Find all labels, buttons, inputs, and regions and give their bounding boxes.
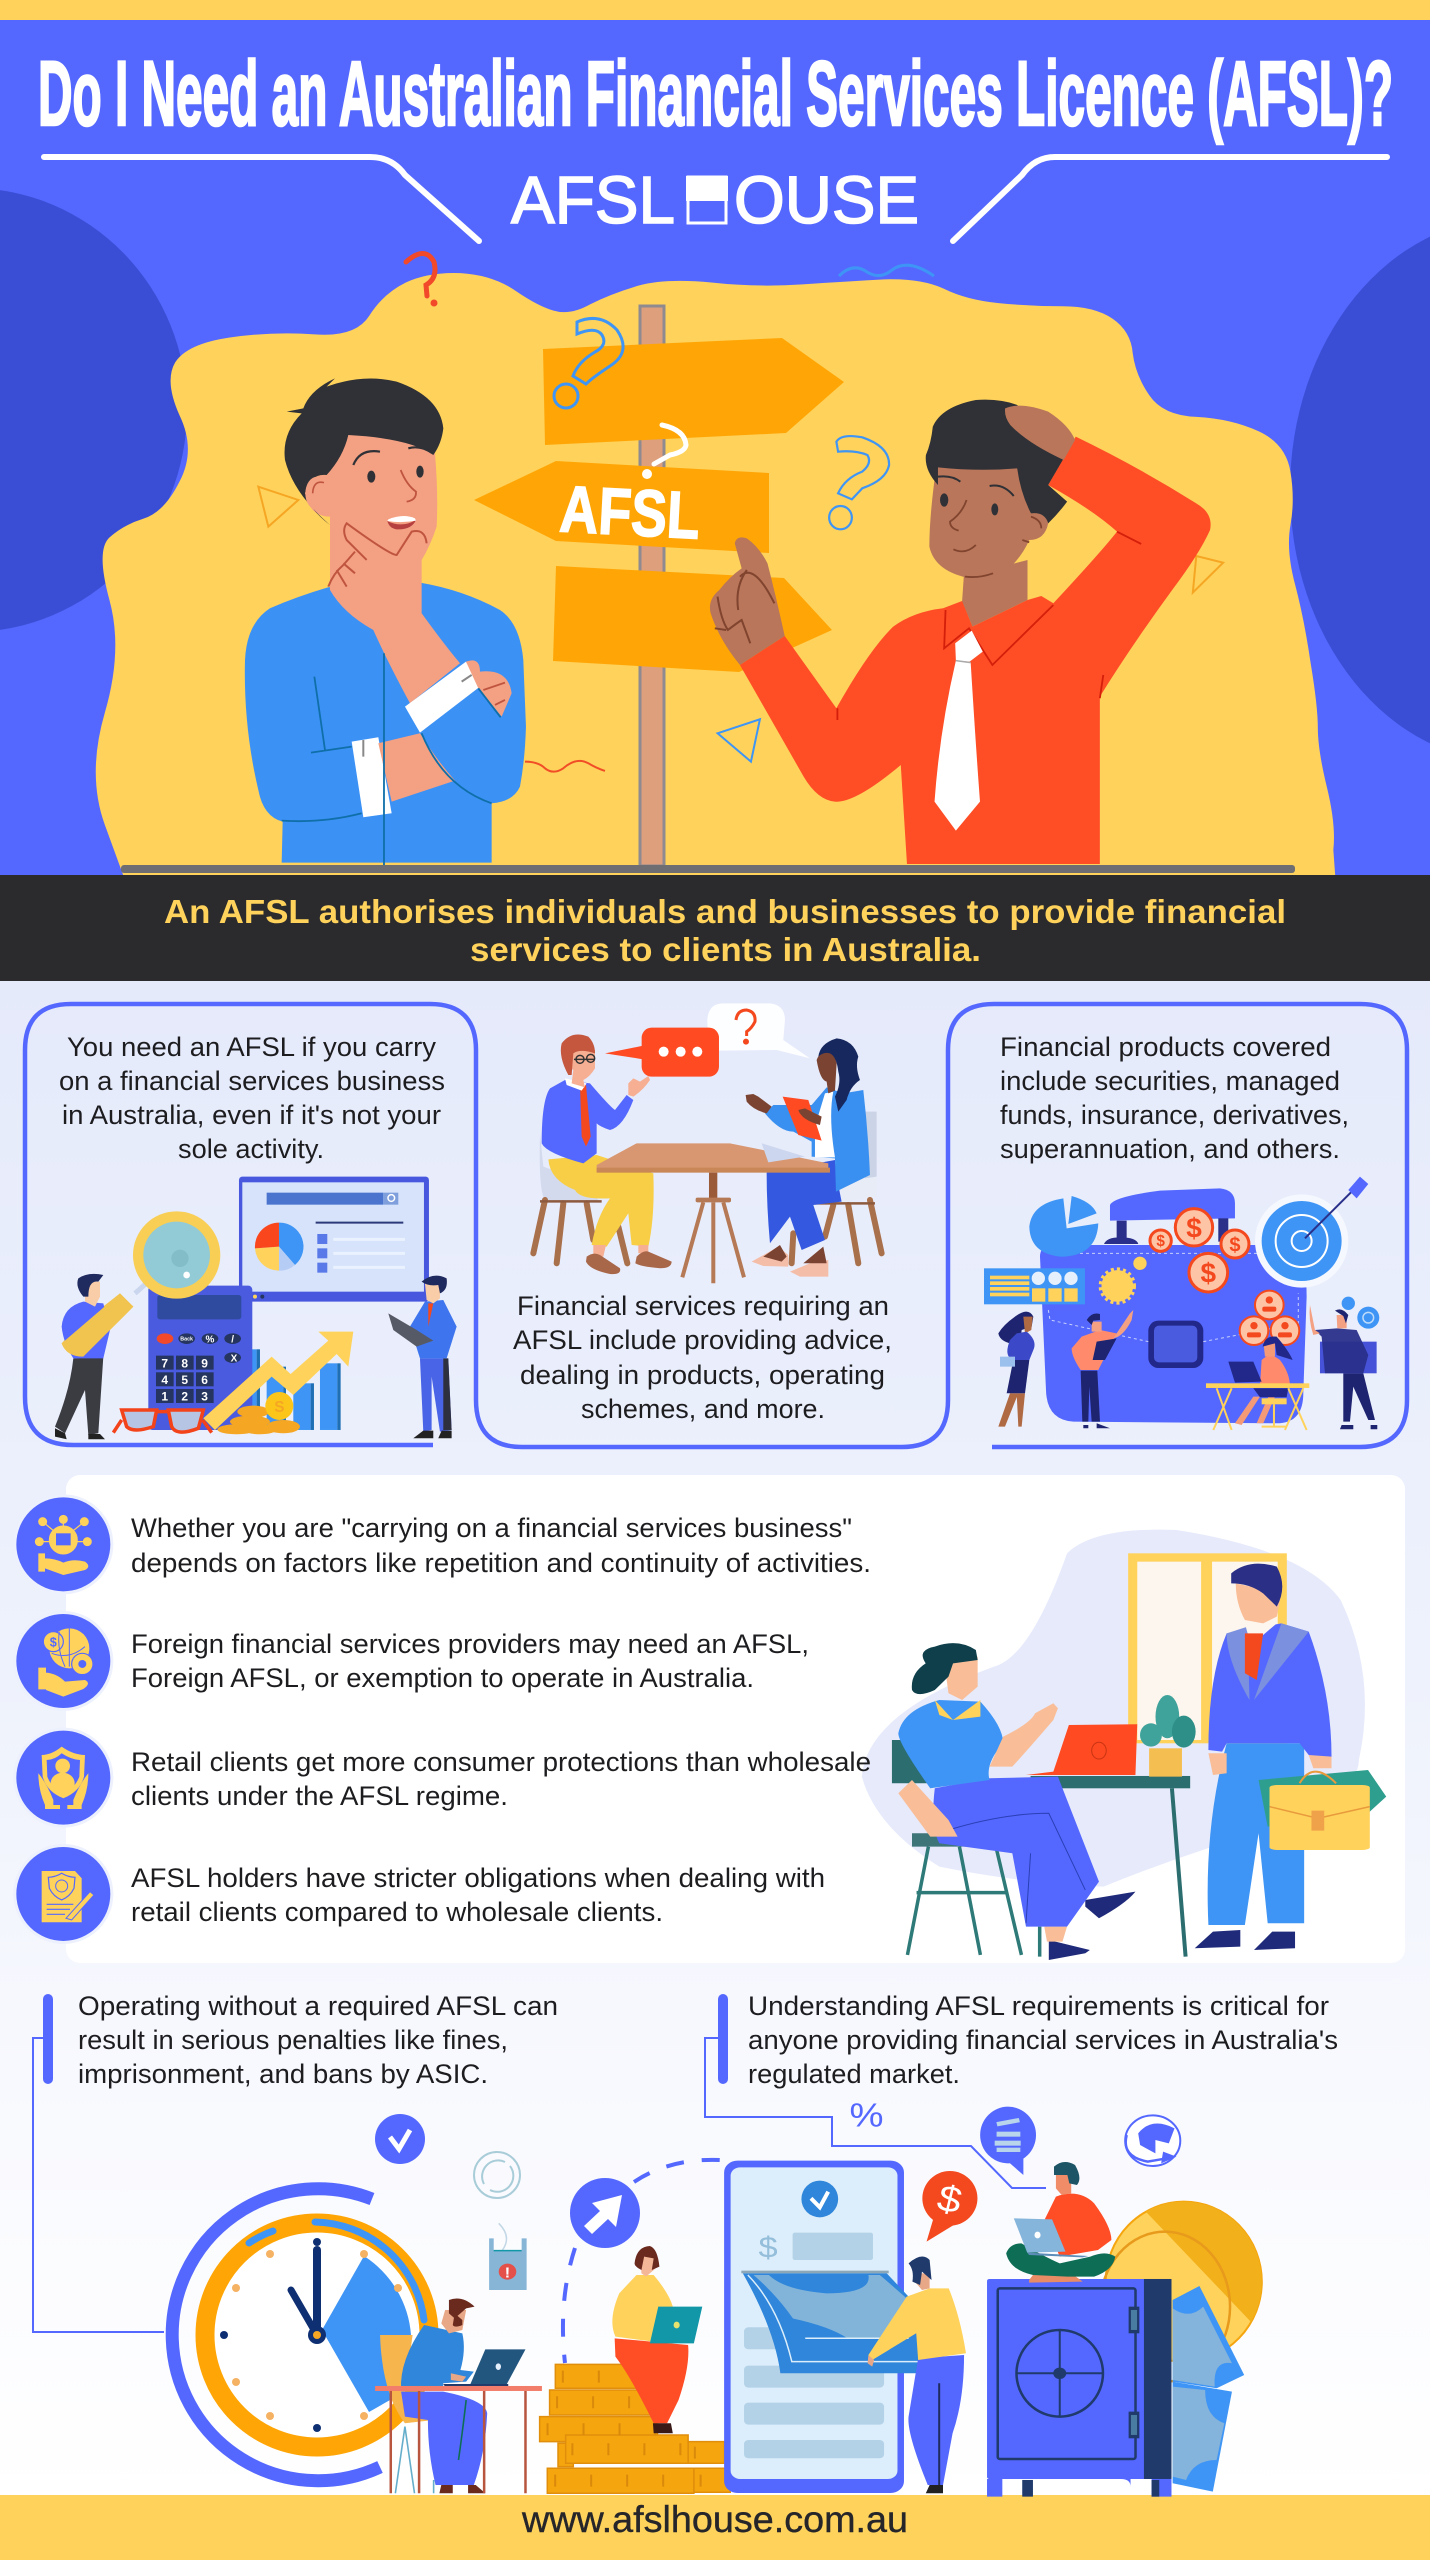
bank notes: [1173, 2286, 1244, 2492]
woman at table: [746, 1038, 882, 1277]
seated woman: [898, 1643, 1135, 1960]
callout: penalties: result in serious penalties like fines,: [78, 2025, 508, 2055]
coins: S: [274, 1399, 284, 1416]
post: [640, 306, 664, 866]
panel 2 text: [513, 1291, 892, 1424]
magnifier: [62, 1211, 220, 1357]
blue squiggle: [839, 265, 934, 276]
connector right: [705, 2038, 1046, 2188]
alert document: !: [505, 2265, 510, 2281]
calculator: 4: [161, 1373, 168, 1387]
standing man: [1195, 1564, 1332, 1950]
light content background: [0, 981, 1430, 2501]
dollar coins: [1150, 1209, 1249, 1292]
pie icon: [1029, 1196, 1098, 1257]
panel 1 illustration: calculator and analysts: [55, 1177, 457, 1439]
calculator: 8: [181, 1356, 188, 1370]
panel 3 illustration: giant briefcase with team: $: [1229, 1234, 1241, 1256]
left analyst: [55, 1274, 133, 1439]
red glasses: [113, 1410, 212, 1433]
list item 1: depends on factors like repetition and continuity of activities.: [131, 1548, 871, 1578]
list text: [131, 1513, 871, 1927]
gears: [1101, 1257, 1379, 1329]
bottom sign: [553, 566, 832, 672]
calculator: X: [231, 1353, 238, 1364]
panel 1 text: You need an AFSL if you carry: [67, 1032, 437, 1062]
bar chart: [214, 1349, 341, 1430]
table: [597, 1143, 830, 1283]
desk and stool: [892, 1740, 1190, 1957]
calculator: [148, 1286, 252, 1430]
icon: arrow badge: [570, 2178, 640, 2248]
alert document: [489, 2223, 527, 2290]
panel 3 illustration: giant briefcase with team: [984, 1177, 1379, 1430]
callout: requirements: [705, 1991, 1338, 2188]
panel 3 text: include securities, managed: [1000, 1066, 1340, 1096]
bottom illustration: phone, safe and people: [724, 2097, 1262, 2497]
laptop and plant: [1026, 1695, 1196, 1777]
left background circle: [0, 188, 187, 632]
pale backdrop: [862, 1530, 1365, 1887]
illustration: woman and man in office: [862, 1530, 1386, 1960]
calculator: /: [231, 1335, 234, 1346]
icon: network in hand: [13, 1494, 113, 1594]
calculator: 2: [181, 1390, 188, 1404]
sign label: AFSL: [558, 471, 702, 553]
monitor: [239, 1177, 429, 1302]
list item 3: clients under the AFSL regime.: [131, 1781, 508, 1811]
calculator: 1: [161, 1390, 168, 1404]
callout: requirements: Understanding AFSL requirements is critical for: [748, 1991, 1329, 2021]
hero panel: [0, 20, 1430, 876]
callout: penalties: [33, 1991, 558, 2332]
list item 1: Whether you are "carrying on a financial services business": [131, 1513, 852, 1543]
white info card: [66, 1475, 1405, 1963]
clock: [172, 2189, 429, 2481]
panel 3 text: superannuation, and others.: [1000, 1134, 1340, 1164]
panel 3 illustration: giant briefcase with team: $: [1201, 1258, 1217, 1289]
coins: [217, 1392, 300, 1434]
character: thinking man in blue: [245, 378, 605, 865]
list item 2: Foreign financial services providers may need an AFSL,: [131, 1629, 809, 1659]
list item 4: [131, 1863, 825, 1927]
panel 1 text: [59, 1032, 445, 1164]
woman on safe: [1006, 2162, 1115, 2283]
red speech bubble: [605, 1028, 719, 1077]
icon: document and pen: [13, 1844, 113, 1944]
connector left: [33, 2038, 164, 2332]
panel 3 text: Financial products covered: [1000, 1032, 1331, 1062]
icon: white question mark on sign: [642, 425, 686, 479]
logo house block: [686, 176, 728, 223]
middle sign: [474, 461, 769, 553]
man at phone: [868, 2257, 966, 2493]
panel 1 text: sole activity.: [178, 1134, 324, 1164]
panel 2 illustration: two people meeting at table: [533, 1003, 882, 1283]
list item 3: Retail clients get more consumer protections than wholesale: [131, 1747, 871, 1777]
books bubble: [980, 2107, 1036, 2175]
panel 2 text: Financial services requiring an: [517, 1291, 889, 1321]
logo: AFSL House: [511, 163, 919, 238]
subtitle text: [164, 893, 1286, 968]
calculator: 7: [161, 1356, 168, 1370]
logo: AFSL House: AFSL: [511, 163, 675, 238]
callout: requirements: regulated market.: [748, 2059, 960, 2089]
big coin: [1100, 2202, 1262, 2382]
calculator: %: [206, 1335, 215, 1346]
list item 1: [131, 1513, 871, 1578]
panel 2 text: dealing in products, operating: [520, 1360, 885, 1390]
panel 1 text: in Australia, even if it's not your: [62, 1100, 441, 1130]
panel 2 text: schemes, and more.: [581, 1394, 825, 1424]
woman on coins: [612, 2246, 702, 2433]
team coins: [1240, 1291, 1299, 1345]
yellow blob: [96, 273, 1335, 875]
safe: [987, 2279, 1171, 2497]
dashed path: [563, 2160, 720, 2363]
subtitle band: [0, 875, 1430, 981]
man at table: [533, 1034, 672, 1274]
signpost: [474, 306, 844, 866]
list item 4: AFSL holders have stricter obligations when dealing with: [131, 1863, 825, 1893]
icon: globe and gear in hand: $: [50, 1636, 57, 1650]
growth arrow: [203, 1332, 353, 1430]
icon: blue question mark on sign: [554, 318, 623, 408]
icon: refresh ring: [474, 2152, 520, 2198]
calculator: 3: [201, 1390, 208, 1404]
icon: red question mark: [406, 254, 438, 306]
subtitle text: services to clients in Australia.: [470, 931, 981, 968]
subtitle text: An AFSL authorises individuals and businesses to provide financial: [164, 893, 1286, 930]
list item 3: [131, 1747, 871, 1811]
panel 2 text: AFSL include providing advice,: [513, 1325, 892, 1355]
right background circle: [1290, 218, 1430, 762]
panel outlines: [25, 1004, 1407, 1447]
phone: $: [759, 2230, 778, 2264]
woman at desk: [1206, 1336, 1309, 1430]
white question bubble: [707, 1003, 810, 1058]
calculator: Back: [180, 1337, 193, 1343]
calculator: 9: [201, 1356, 208, 1370]
dollar bubble: $: [933, 2177, 966, 2222]
left title bracket: [44, 157, 479, 241]
icon: shield and person in hands: [13, 1728, 113, 1828]
callout: penalties: imprisonment, and bans by ASIC.: [78, 2059, 488, 2089]
panel 3 illustration: giant briefcase with team: $: [1156, 1233, 1165, 1250]
footer url: www.afslhouse.com.au: [521, 2499, 908, 2540]
briefcase with money: [1259, 1770, 1386, 1850]
panel 3 illustration: giant briefcase with team: $: [1186, 1212, 1202, 1243]
top yellow band: [0, 0, 1430, 20]
percent sign: %: [849, 2097, 883, 2134]
dashboard card: [984, 1268, 1085, 1304]
character: man in red scratching head: [710, 400, 1223, 864]
calculator: 6: [201, 1373, 208, 1387]
desk worker: [375, 2298, 542, 2493]
ground line: [121, 865, 1295, 873]
briefcase: [1040, 1188, 1307, 1423]
window: [1128, 1553, 1287, 1743]
calculator: 5: [181, 1373, 188, 1387]
bottom illustration: desk worker, coins and woman: [375, 2223, 730, 2493]
icon: globe and gear in hand: [13, 1611, 113, 1711]
globe icon: [1125, 2115, 1180, 2166]
logo: AFSL House: OUSE: [734, 163, 919, 238]
list icons: [13, 1494, 113, 1944]
callout: penalties: Operating without a required AFSL can: [78, 1991, 558, 2021]
phone: [724, 2161, 904, 2493]
panel 3 text: funds, insurance, derivatives,: [1000, 1100, 1349, 1130]
right analyst: [388, 1276, 457, 1438]
list item 2: Foreign AFSL, or exemption to operate in Australia.: [131, 1663, 754, 1693]
icon: check badge: [375, 2114, 425, 2164]
callout: requirements: anyone providing financial services in Australia's: [748, 2025, 1338, 2055]
dollar bubble: [922, 2171, 977, 2242]
coin stack: [540, 2364, 730, 2493]
list item 2: [131, 1629, 809, 1693]
footer band: [0, 2495, 1430, 2560]
top sign: [543, 338, 844, 445]
target icon: [1255, 1177, 1368, 1288]
right title bracket: [953, 157, 1387, 241]
panel 3 text: [1000, 1032, 1349, 1164]
cash from phone: [741, 2271, 918, 2373]
man pointing: [1072, 1310, 1133, 1428]
panel 1 text: on a financial services business: [59, 1066, 445, 1096]
woman standing: [998, 1312, 1035, 1427]
list item 4: retail clients compared to wholesale clients.: [131, 1897, 663, 1927]
man with folder: [1310, 1305, 1377, 1429]
